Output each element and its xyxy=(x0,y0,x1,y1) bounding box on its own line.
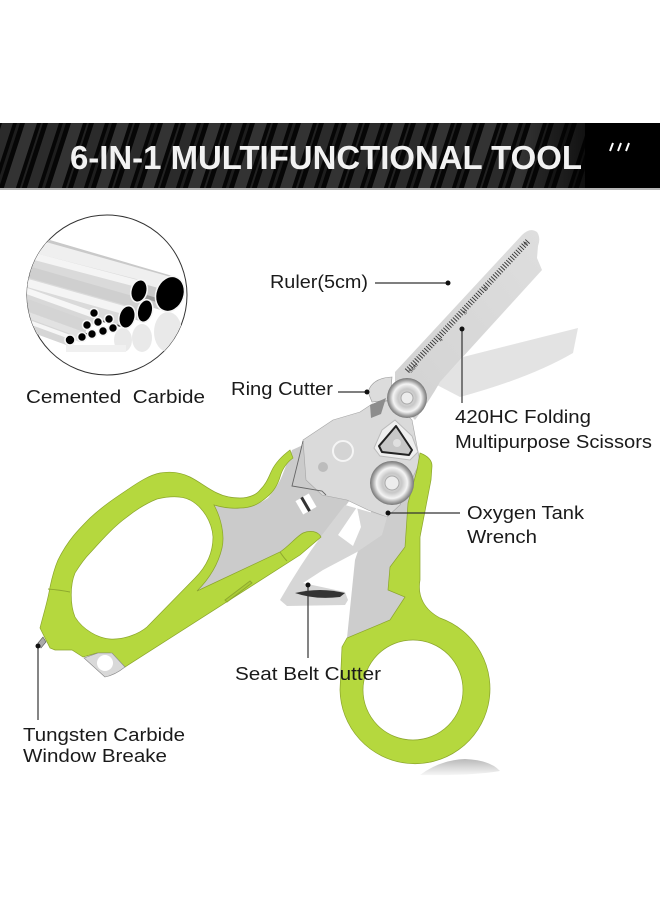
ruler numbers: 4 xyxy=(438,337,445,343)
tube reflections xyxy=(66,312,182,352)
callout: window breaker: Tungsten Carbide xyxy=(23,725,185,745)
left handle gray plate xyxy=(197,445,350,592)
callout: ruler xyxy=(270,272,450,292)
right green handle xyxy=(340,453,490,764)
triangle adjuster xyxy=(374,420,418,460)
lower blade xyxy=(437,328,578,397)
ruler numbers: 0 xyxy=(523,241,530,247)
ruler numbers xyxy=(408,241,530,374)
callout: window breaker xyxy=(23,644,185,766)
callout: folding scissors xyxy=(455,326,652,452)
left green handle xyxy=(40,450,321,667)
ruler numbers: 5cm xyxy=(408,362,420,374)
title banner xyxy=(0,123,660,190)
callout: oxygen tank wrench xyxy=(386,503,585,547)
ring cutter xyxy=(368,377,392,402)
seat belt cutter hook xyxy=(280,505,387,606)
pivot screw lower xyxy=(370,461,414,505)
slot xyxy=(295,493,317,515)
label: cemented carbide: Cemented Carbide xyxy=(26,387,205,407)
callout: folding scissors: 420HC Folding xyxy=(455,407,591,427)
callout: ring cutter: Ring Cutter xyxy=(231,379,333,399)
ruler numbers: 2 xyxy=(483,286,490,292)
material circle: steel tubes xyxy=(10,215,189,375)
central body plate xyxy=(303,400,420,517)
floor shadow xyxy=(420,759,500,775)
callout: seat belt cutter xyxy=(235,582,381,684)
callout: folding scissors: Multipurpose Scissors xyxy=(455,432,652,452)
callout: seat belt cutter: Seat Belt Cutter xyxy=(235,664,381,684)
pivot screw upper xyxy=(387,378,427,418)
upper blade with ruler xyxy=(395,230,542,420)
handle details xyxy=(48,552,287,602)
eyelet xyxy=(84,653,125,677)
ruler numbers: 3 xyxy=(462,310,469,316)
callout: oxygen tank wrench: Wrench xyxy=(467,527,537,547)
window breaker tip xyxy=(38,637,46,648)
callout: ring cutter xyxy=(231,379,370,399)
tube openings xyxy=(65,272,189,345)
callout: ruler: Ruler(5cm) xyxy=(270,272,368,292)
scissors illustration xyxy=(38,230,578,764)
callout: window breaker: Window Breake xyxy=(23,746,167,766)
title: 6-IN-1 MULTIFUNCTIONAL TOOL xyxy=(70,139,582,176)
callout: oxygen tank wrench: Oxygen Tank xyxy=(467,503,585,523)
icon: banner slashes xyxy=(610,143,629,151)
right handle gray plate xyxy=(347,466,422,638)
